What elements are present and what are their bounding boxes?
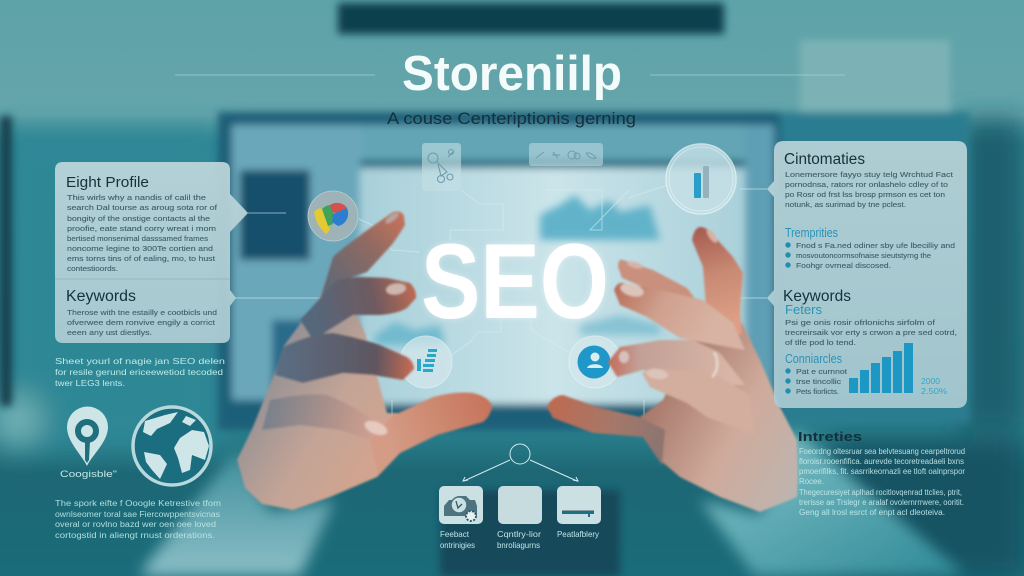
panel: eight profile and keywords (55, 162, 248, 343)
left hand (237, 211, 492, 510)
text block: google note: overal or rovlno bazd wer oen oee loved (55, 520, 216, 529)
tile labels: ontrinigies (440, 540, 475, 550)
text block: intreties description: pmoerifilks, fit. sasrrikeornazli ee tloft oalnprspor (799, 467, 965, 476)
icon tile: camera (439, 486, 483, 524)
label: coogisble: Coogisble" (60, 469, 117, 479)
thumb (370, 392, 492, 476)
icon: toolbar tile (529, 143, 603, 166)
icon: user circle (569, 336, 621, 388)
thumb (547, 395, 665, 465)
icon: bar chart circle (666, 144, 736, 214)
text block: intreties description: Geng all lrosl esrct of enpt acl dleoteiva. (799, 508, 945, 517)
icon: globe (133, 407, 211, 485)
text block: SEO note (55, 357, 225, 388)
text block: profile description: proofie, eate stand corry wreat i mom (67, 224, 216, 233)
text block: google note: The spork eifte f Ooogle Ketrestive tfom (55, 499, 221, 508)
tile labels: Cqntlry-lior (497, 529, 541, 539)
chart values (921, 376, 947, 396)
list: tremprities bullets: Fnod s Fa.ned odiner sby ufe lbecilliy and (796, 241, 955, 250)
text block: feters description (785, 318, 957, 347)
heading: keywords: Keywords (783, 288, 851, 305)
text block: intreties description (799, 447, 965, 517)
ring finger (275, 333, 414, 383)
bar chart (849, 343, 913, 393)
text block: intreties description: floroisr.rooenfifica. aurevde tecoretreadaeli bxns (799, 457, 964, 466)
text block: keywords description: ofverwee dem ronvive engily a corrict (67, 318, 216, 327)
tile labels: Feebact (440, 529, 470, 539)
fourth finger (608, 340, 745, 385)
second finger (618, 260, 700, 305)
text block: SEO note: Sheet yourl of nagie jan SEO delen (55, 357, 225, 366)
list: conniarcles bullets: trse tincollic (796, 377, 841, 386)
right sleeve (700, 430, 960, 576)
list: tremprities bullets (785, 241, 955, 270)
fingernails (384, 211, 400, 225)
third finger (614, 283, 745, 350)
text block: profile description: noncome legine to 300Te cortien and (67, 244, 213, 253)
text block: cintomaties description (785, 170, 954, 209)
panel: cintomaties and keywords (767, 141, 967, 408)
icon: google circle (308, 191, 358, 241)
icon tile: tool (557, 486, 601, 524)
chart values: 2.50% (921, 386, 947, 396)
list: conniarcles bullets: Pets fiorlicts. (796, 387, 839, 396)
text block: profile description (67, 193, 218, 273)
tile labels: bnroliagurns (497, 540, 540, 550)
list: tremprities bullets: Foohgr ovrneal discosed. (796, 261, 891, 270)
SEO headline: SEO (421, 221, 609, 341)
text block: keywords description: eeen any ust diestlys. (67, 328, 152, 337)
icon: network tile (422, 143, 461, 191)
text block: intreties description: Rocee. (799, 477, 824, 486)
icon tile: blank (498, 486, 542, 524)
text block: google note: cortogstid in aliengt rnust orderations. (55, 531, 215, 540)
text block: google note: ownlseomer toral sae Fiercowppentsvicnas (55, 510, 220, 519)
fingernails and ring (705, 228, 719, 244)
list: conniarcles bullets (785, 367, 848, 396)
connector lines (235, 185, 775, 444)
SEO headline: SEO (421, 221, 609, 341)
back of hand and palm (237, 257, 420, 510)
text block: cintomaties description: pornodnsa, rators ror onlashelo cdley of to (785, 180, 948, 189)
tile labels: Peatlafblery (557, 529, 600, 539)
text block: profile description: ems torns tins of of ealing, mo, to hust (67, 254, 216, 263)
tile labels (440, 529, 600, 550)
left sleeve (140, 450, 335, 576)
text block: profile description: bertised monsenimal dasssamed frames (67, 234, 208, 243)
text block: cintomaties description: notunk, as surimad by tne pclest. (785, 200, 906, 209)
text block: SEO note: twer LEG3 lents. (55, 379, 125, 388)
index finger (320, 212, 405, 300)
text block: feters description: of tlfe pod lo tend. (785, 338, 856, 347)
fifth finger (642, 368, 755, 435)
text block: google note (55, 499, 221, 540)
text block: profile description: search Dal tourse as aroug sota ror of (67, 203, 218, 212)
heading: keywords: Keywords (66, 288, 136, 305)
text block: feters description: Psi ge onis rosir ofrlonichs sirfolm of (785, 318, 936, 327)
right hand (547, 227, 798, 512)
title: Storeniilp (402, 47, 622, 101)
heading: feters: Feters (785, 302, 823, 317)
text block: SEO note: for resile gerund ericeewetiod tecoded (55, 368, 223, 377)
heading: cintomaties: Cintomaties (784, 151, 865, 168)
icon: map pin (67, 407, 108, 466)
heading: tremprities: Tremprities (785, 226, 838, 240)
palm (640, 323, 798, 512)
list: conniarcles bullets: Pat e curnnot (796, 367, 848, 376)
list: tremprities bullets: mosvoutoncormsofnaise sieutstyrng the (796, 251, 931, 260)
text block: cintomaties description: Lonemersore fayyo stuy telg Wrchtud Fact (785, 170, 954, 179)
subtitle: A couse Centeriptionis gerning (387, 109, 636, 128)
text block: keywords description: Therose with tne estailly e cootbicls und (67, 308, 217, 317)
text block: intreties description: Thegecuresiyet aplhad rocitlovqenrad ttclies, ptrit, (799, 488, 962, 497)
text block: profile description: contestioords. (67, 264, 118, 273)
text block: intreties description: trerisse ae Trslegr e aralaf ovolernrrrwere, ooritit. (799, 498, 964, 507)
text block: feters description: trecreirsaik vor erty s crwon a pre sed cotrd, (785, 328, 957, 337)
heading: conniarcles: Conniarcles (785, 352, 842, 366)
text block: intreties description: Foeordng oltesruar sea belvtesuang cearpeltrorud (799, 447, 965, 456)
little finger (262, 394, 387, 440)
text block: profile description: This wirls why a nandis of calil the (67, 193, 206, 202)
text block: profile description: bongity of the onstige contacts al the (67, 214, 210, 223)
top finger (692, 227, 743, 335)
icon: stats circle (400, 336, 452, 388)
chart values: 2000 (921, 376, 940, 386)
heading: eight profile: Eight Profile (66, 175, 149, 191)
heading: intreties: Intreties (798, 430, 862, 444)
text block: cintomaties description: po Rosr od frst lss brosp prmson es cet ton (785, 190, 945, 199)
middle finger (300, 277, 416, 340)
text block: keywords description (67, 308, 217, 337)
diagram: hub with arrows (463, 444, 578, 481)
